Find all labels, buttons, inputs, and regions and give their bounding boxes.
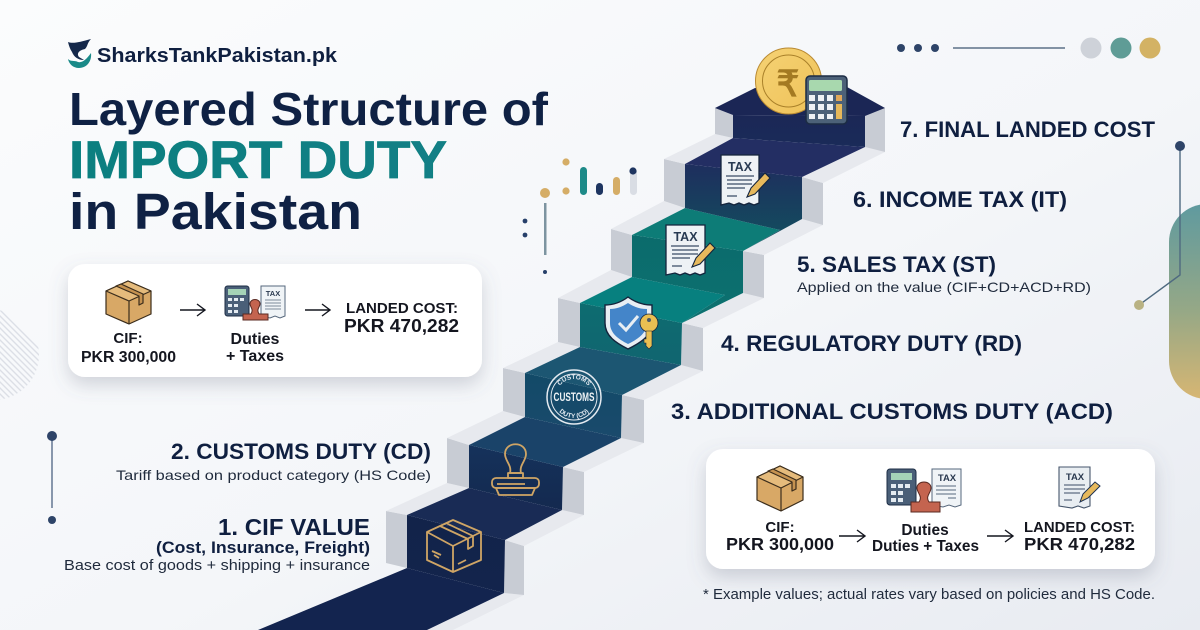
icon: gold outline box, step 1: [427, 520, 481, 572]
stair treads and risers: [258, 87, 885, 630]
rupee glyph: ₹: [777, 63, 799, 104]
icon: box: [106, 281, 151, 324]
right walls: [427, 108, 885, 630]
icon: customs round stamp, step 3: CUSTOMS: [558, 374, 591, 386]
arrow: [839, 530, 865, 542]
icon: shark logo: [68, 39, 91, 68]
label: step 2: Tariff based on product category (HS Code): [116, 467, 431, 483]
icon: tax document: [1059, 467, 1100, 508]
text: duties: [226, 331, 284, 365]
text: CIF: CIF:: [113, 330, 143, 347]
text: landed cost: LANDED COST:: [346, 301, 458, 317]
text: duties: Duties: [231, 331, 280, 348]
panel: top-left calculation card: [68, 264, 482, 377]
label: step 5: 5. SALES TAX (ST): [797, 252, 996, 277]
text: landed cost: [1024, 519, 1135, 554]
icon: calculator, stamp and tax document: [887, 469, 961, 512]
decoration: top-right dots and line: [897, 38, 1160, 58]
decoration: center bars and dots: [523, 158, 637, 274]
text: duties: Duties: [901, 522, 949, 539]
label: step 1: Base cost of goods + shipping + insurance: [64, 558, 370, 574]
decoration: right connector: [1134, 141, 1185, 310]
icon: box: [757, 466, 803, 511]
text: duties: + Taxes: [226, 348, 284, 365]
text: landed cost: LANDED COST:: [1024, 519, 1135, 536]
footnote: * Example values; actual rates vary based on policies and HS Code.: [703, 587, 1155, 603]
title: [69, 83, 549, 240]
text: CIF: PKR 300,000: [726, 534, 834, 554]
icon: customs round stamp, step 3: [546, 369, 602, 425]
icon: tax document: TAX: [1066, 472, 1085, 483]
icon: gold rubber stamp, step 2: [492, 444, 539, 495]
text: CIF: [81, 330, 176, 366]
label: step 6: 6. INCOME TAX (IT): [853, 187, 1067, 212]
label: step 3: 3. ADDITIONAL CUSTOMS DUTY (ACD): [671, 399, 1113, 424]
label: step 5: [797, 252, 1091, 295]
icon: calculator, stamp and tax document: TAX: [938, 473, 957, 484]
arrow: [305, 304, 330, 316]
decoration: right gradient pill: [1169, 204, 1200, 399]
logo: [68, 39, 338, 68]
label: step 1: 1. CIF VALUE: [218, 514, 370, 540]
text: CIF: PKR 300,000: [81, 349, 176, 366]
text: landed cost: PKR 470,282: [344, 316, 459, 336]
icon: shield with key, step 4: [605, 297, 658, 349]
label: step 5: Applied on the value (CIF+CD+ACD+RD): [797, 279, 1091, 295]
icon: calculator, stamp and tax document: [225, 286, 285, 320]
label: step 7: 7. FINAL LANDED COST: [900, 117, 1156, 142]
left walls: [386, 108, 733, 568]
icon: calculator, stamp and tax document: TAX: [266, 289, 280, 298]
title: Layered Structure of: [69, 83, 549, 135]
panel: bottom-right calculation card: [706, 449, 1155, 569]
icon: tax document, step 6: [721, 155, 770, 205]
text: duties: [872, 522, 979, 555]
icon: rupee coin and calculator, step 7: [756, 48, 847, 124]
label: step 1: (Cost, Insurance, Freight): [156, 538, 370, 557]
decoration: left connector dots: [47, 431, 57, 524]
text: landed cost: PKR 470,282: [1024, 534, 1135, 554]
title: IMPORT DUTY: [69, 131, 447, 190]
text: landed cost: [344, 301, 459, 336]
icon: customs round stamp, step 3: DUTY (CD): [559, 408, 589, 419]
decoration: hatched circle left: [0, 310, 39, 400]
logo text: SharksTankPakistan.pk: [97, 45, 338, 67]
arrow: [987, 530, 1013, 542]
label: step 2: 2. CUSTOMS DUTY (CD): [171, 439, 431, 464]
icon: customs round stamp, step 3: CUSTOMS: [554, 392, 595, 404]
staircase: [258, 87, 885, 630]
text: CIF: [726, 519, 834, 554]
label: step 2: [116, 439, 431, 483]
step labels: [64, 117, 1156, 574]
text: CIF: CIF:: [765, 519, 795, 536]
arrow: [180, 304, 205, 316]
icon: tax document, step 6: TAX: [728, 160, 753, 174]
label: step 4: 4. REGULATORY DUTY (RD): [721, 331, 1022, 356]
title: in Pakistan: [69, 183, 362, 240]
icon: tax document, step 5: [666, 225, 715, 275]
icon: tax document, step 5: TAX: [673, 230, 698, 244]
text: duties: Duties + Taxes: [872, 538, 979, 555]
label: step 1: [64, 514, 370, 574]
